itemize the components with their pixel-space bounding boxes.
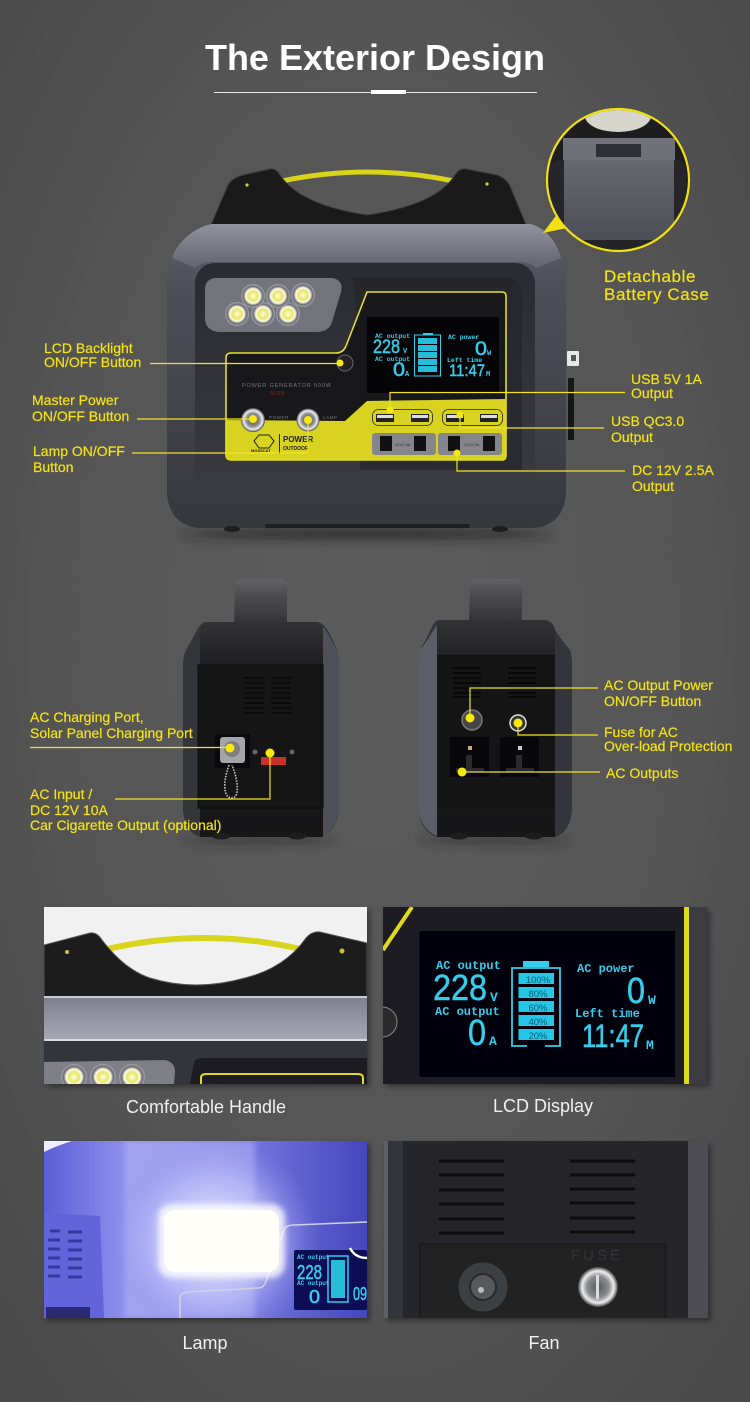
callout: lamp button: Button <box>33 459 73 475</box>
callout: lamp button <box>33 416 312 475</box>
photo: lamp lit: 09 <box>353 1284 367 1304</box>
feet <box>450 832 543 840</box>
photo: lamp lit: 228 <box>297 1262 322 1284</box>
callout: AC output power button: ON/OFF Button <box>604 693 701 709</box>
callout: AC input / DC 12V 10A <box>30 748 274 833</box>
AC outlets <box>450 737 539 777</box>
callout: AC input / DC 12V 10A: DC 12V 10A <box>30 802 108 818</box>
callout pointer <box>543 213 567 233</box>
yellow handle <box>282 172 454 181</box>
photo: LCD display: M <box>646 1038 654 1053</box>
vents <box>244 678 291 713</box>
caption: LCD display: LCD Display <box>493 1096 593 1116</box>
black handle housing <box>210 169 527 227</box>
feet <box>212 832 306 840</box>
callout: LCD backlight button <box>44 340 344 370</box>
battery: 40% <box>528 1017 548 1028</box>
LCD <box>420 931 675 1077</box>
battery <box>512 961 560 1046</box>
callout: AC charging port: AC Charging Port, <box>30 709 144 725</box>
callout: AC output power button <box>466 677 713 722</box>
battery: 100% <box>526 975 551 986</box>
rear inset panel <box>437 655 555 808</box>
callout: master power button: ON/OFF Button <box>32 408 129 424</box>
buttons <box>241 355 353 432</box>
body <box>183 622 339 837</box>
callout: LCD backlight button: LCD Backlight <box>44 340 133 356</box>
fuse <box>510 715 526 731</box>
metal button <box>578 1267 618 1307</box>
lamp panel <box>205 278 342 332</box>
product label <box>242 383 338 420</box>
inset: detachable battery case <box>543 100 709 304</box>
product label: LAMP <box>323 415 338 420</box>
photo: lamp lit: 0 <box>309 1287 320 1307</box>
callout: master power button <box>32 392 257 424</box>
LCD screen: W <box>487 350 492 358</box>
LCD screen: 0 <box>393 360 405 381</box>
photo: LCD display <box>367 907 707 1084</box>
handle <box>234 579 287 625</box>
LCD screen: 11:47 <box>449 361 485 380</box>
callout: fuse <box>514 718 732 754</box>
LCD screen: AC output <box>375 333 410 340</box>
callout: AC outputs <box>458 765 678 781</box>
light glow <box>142 1160 309 1318</box>
DC ports: 12V2.5A <box>464 442 480 447</box>
yellow handle <box>103 938 305 950</box>
photo: LCD display: W <box>648 993 656 1008</box>
photo: fan vents <box>384 1141 708 1324</box>
photo: handle <box>44 907 367 1090</box>
title underline <box>214 90 537 94</box>
callout: AC charging port: Solar Panel Charging Port <box>30 725 193 741</box>
callout: DC 12V 2.5A: Output <box>632 478 674 494</box>
caption: comfortable handle: Comfortable Handle <box>126 1097 286 1117</box>
photo: LCD display: AC output <box>436 959 501 973</box>
callout: DC 12V 2.5A: DC 12V 2.5A <box>632 462 714 478</box>
AC charging port <box>215 734 250 798</box>
callout: USB 5V 1A: USB 5V 1A <box>631 371 702 387</box>
body <box>418 620 572 837</box>
lamp <box>164 1210 279 1272</box>
DC ports <box>372 433 502 455</box>
DC ports: 12V2.5A <box>395 442 411 447</box>
battery: 60% <box>528 1003 548 1014</box>
bottom-left port <box>46 1307 90 1318</box>
top light band <box>172 224 561 268</box>
product label: A1700 <box>270 391 285 397</box>
lower face <box>44 1041 367 1084</box>
photo: LCD display: 228 <box>433 967 487 1008</box>
callout: USB 5V 1A <box>386 371 702 414</box>
side panel <box>67 1214 104 1318</box>
black body face <box>437 620 555 837</box>
vent slots <box>439 1161 635 1233</box>
logo: MOSSCAT <box>251 448 271 453</box>
callout: AC input / DC 12V 10A: AC Input / <box>30 786 92 802</box>
callout: LCD backlight button: ON/OFF Button <box>44 354 141 370</box>
ground shadow <box>185 837 335 843</box>
photo: LCD display: 0 <box>627 970 645 1011</box>
photo: lamp lit: AC output <box>297 1280 330 1287</box>
product label: POWER <box>269 415 289 420</box>
small LCD <box>294 1250 367 1310</box>
backlight button <box>383 1006 398 1038</box>
photo: LCD display: V <box>490 990 498 1005</box>
inner dark face <box>195 263 535 491</box>
callout: AC charging port <box>30 709 234 752</box>
title: The Exterior Design <box>205 37 545 78</box>
photo: LCD display: AC power <box>577 962 635 976</box>
callout: USB 5V 1A: Output <box>631 385 673 401</box>
feet <box>224 524 508 532</box>
logo <box>251 434 313 454</box>
logo: OUTDOOR <box>283 446 309 452</box>
fuse mark: FUSE <box>571 1247 623 1264</box>
photo: lamp lit <box>44 1141 367 1318</box>
callout: fuse: Fuse for AC <box>604 724 678 740</box>
handle <box>469 579 522 623</box>
side clip and strap <box>567 351 579 440</box>
main product: front view <box>167 169 579 539</box>
LCD screen: AC output <box>375 356 410 363</box>
battery: 20% <box>528 1031 548 1042</box>
control panel <box>226 292 506 460</box>
callout: USB QC3.0: USB QC3.0 <box>611 413 684 429</box>
photo: LCD display: Left time <box>575 1007 640 1021</box>
callout: USB QC3.0 <box>456 412 684 445</box>
photo: LCD display: A <box>489 1034 497 1049</box>
LCD screen <box>367 317 499 393</box>
photo: LCD display: 11:47 <box>582 1018 644 1054</box>
body shell <box>167 224 566 528</box>
lamp halo <box>158 1204 285 1278</box>
photo: LCD display: 0 <box>468 1012 486 1053</box>
LCD screen: V <box>403 348 408 356</box>
LEDs <box>61 1064 87 1084</box>
lower panel <box>420 1244 666 1324</box>
inset circle <box>547 100 689 252</box>
vertical light column <box>125 1141 255 1318</box>
LCD screen: AC power <box>448 334 479 341</box>
callout: DC 12V 2.5A <box>454 450 714 494</box>
callout: AC input / DC 12V 10A: Car Cigarette Output (optional) <box>30 817 221 833</box>
battery: 80% <box>528 989 548 1000</box>
left grey side <box>418 625 437 836</box>
black housing <box>44 932 367 997</box>
inset label line 2: Battery Case <box>604 285 709 304</box>
callout: AC output power button: AC Output Power <box>604 677 713 693</box>
panel outline <box>180 1222 367 1318</box>
photo: LCD display: AC output <box>435 1005 500 1019</box>
LCD screen: 228 <box>373 337 400 358</box>
callout: master power button: Master Power <box>32 392 119 408</box>
left side view of product <box>183 579 339 843</box>
rear inset panel <box>198 665 323 808</box>
callout: lamp button: Lamp ON/OFF <box>33 443 125 459</box>
photo: lamp lit: AC output <box>297 1254 330 1261</box>
right side view of product <box>418 579 572 843</box>
callout: AC outputs: AC Outputs <box>606 765 678 781</box>
inset label: Detachable <box>604 267 696 286</box>
caption: fan: Fan <box>528 1333 560 1353</box>
ground shadow <box>420 837 570 843</box>
product label: POWER GENERATOR 500W <box>242 383 332 389</box>
caption: lamp: Lamp <box>182 1333 228 1353</box>
top-left highlight <box>44 1141 72 1152</box>
grey band <box>44 997 367 1040</box>
LCD screen: M <box>486 371 490 379</box>
DC output socket <box>252 750 294 765</box>
right grey side <box>323 627 339 836</box>
ground shadow <box>181 529 551 539</box>
logo: POWER <box>283 435 313 444</box>
callout: USB QC3.0: Output <box>611 429 653 445</box>
control panel outline <box>201 1074 363 1086</box>
knob <box>458 1262 508 1312</box>
yellow trim <box>383 907 412 950</box>
LCD screen: A <box>405 371 410 379</box>
vents <box>453 668 536 697</box>
black body face <box>200 622 323 837</box>
LCD screen: 0 <box>475 339 487 360</box>
callout: fuse: Over-load Protection <box>604 738 732 754</box>
AC power button <box>462 710 482 730</box>
side vents <box>48 1231 82 1277</box>
LCD screen: Left time <box>447 357 482 364</box>
USB ports <box>372 410 502 426</box>
